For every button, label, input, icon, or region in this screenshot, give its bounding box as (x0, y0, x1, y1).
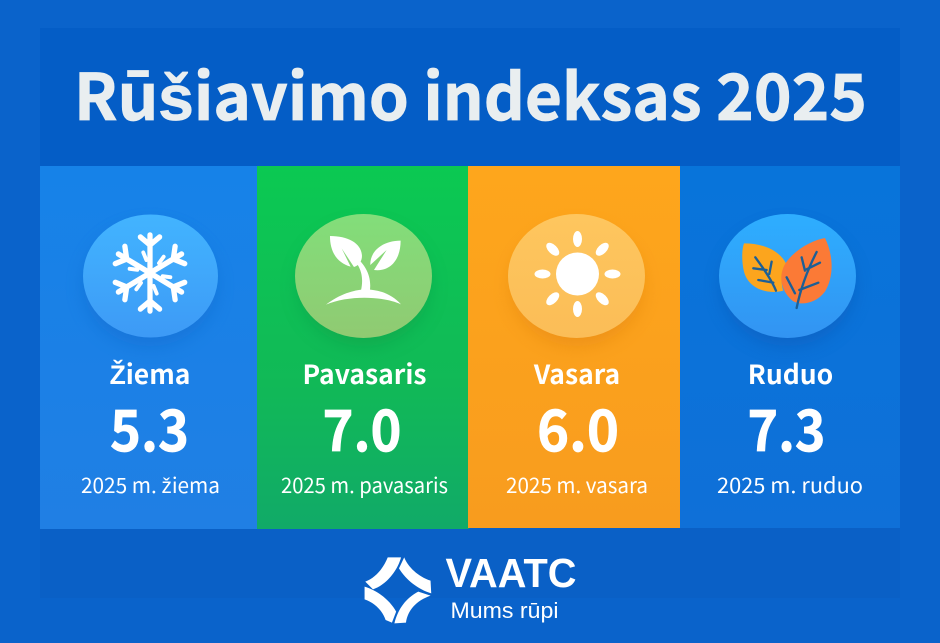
icon: VAATC mark (365, 557, 431, 623)
label: Žiema: Žiema (110, 353, 190, 392)
footer band (40, 528, 900, 598)
panel: summer (468, 166, 680, 528)
value: 5.3: 5.3 (110, 386, 189, 468)
label: Pavasaris: Pavasaris (302, 353, 427, 392)
panel: autumn (680, 166, 900, 528)
brand name: VAATC (446, 550, 576, 596)
panel: winter (40, 166, 258, 529)
tagline: Mums rūpi (450, 598, 558, 623)
title: Rūšiavimo indeksas 2025 (74, 47, 867, 139)
value: 7.0: 7.0 (322, 386, 402, 468)
label: Ruduo: Ruduo (748, 353, 833, 392)
caption: 2025 m. vasara (506, 470, 648, 500)
panel: spring (257, 166, 469, 529)
caption: 2025 m. pavasaris (281, 470, 448, 500)
icon: snowflake (114, 235, 186, 311)
title panel (40, 28, 900, 166)
caption: 2025 m. žiema (81, 470, 220, 500)
logo (365, 550, 576, 623)
caption: 2025 m. ruduo (717, 470, 863, 500)
value: 6.0: 6.0 (537, 386, 619, 468)
icon: sun (534, 231, 620, 317)
value: 7.3: 7.3 (748, 386, 826, 468)
icon: leaves (742, 238, 832, 308)
icon: sprout (326, 236, 401, 305)
label: Vasara: Vasara (533, 353, 620, 392)
